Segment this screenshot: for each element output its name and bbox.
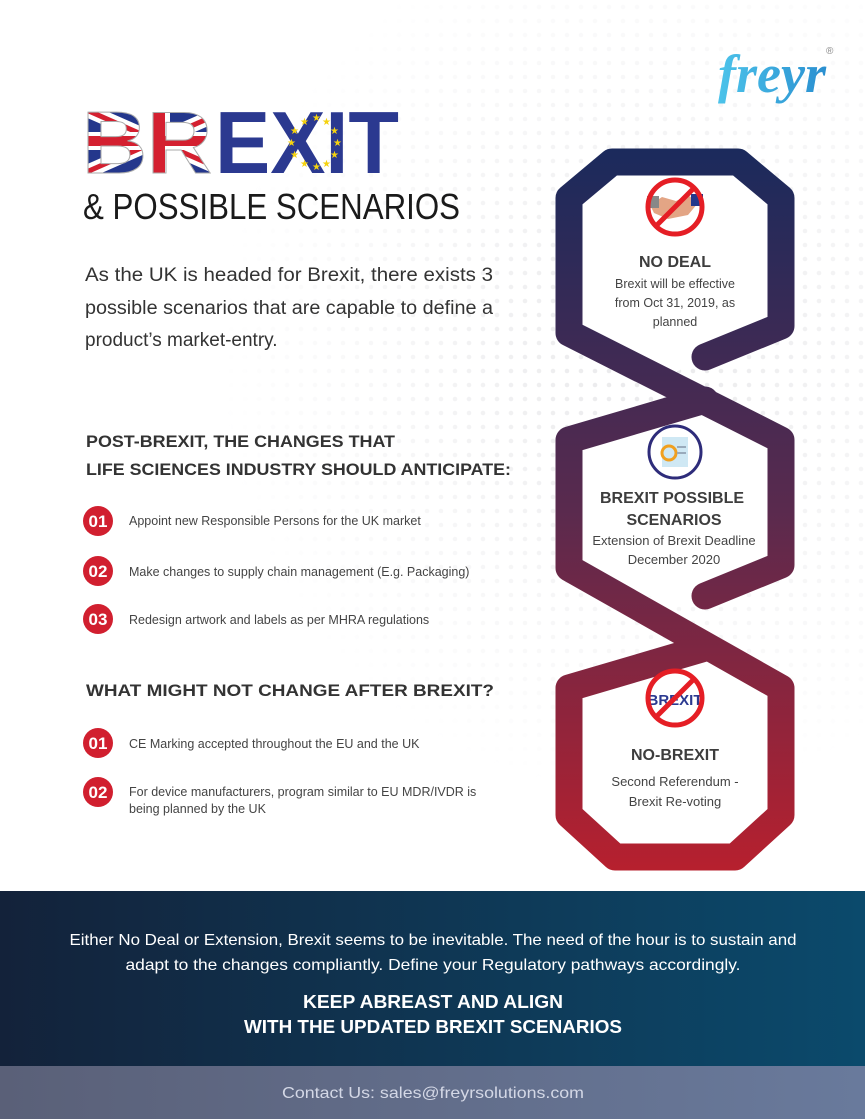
scenario: no-brexit: NO-BREXIT: [631, 747, 719, 764]
scenario: extension: December 2020: [628, 552, 720, 567]
intro paragraph: As the UK is headed for Brexit, there exists 3: [85, 265, 493, 286]
item 01: 01: [89, 512, 107, 531]
title: BREXIT: ★: [290, 150, 299, 161]
intro paragraph: product’s market-entry.: [85, 330, 278, 351]
item 03: [83, 604, 429, 634]
icon: no handshake: [646, 178, 704, 236]
footer band: adapt to the changes compliantly. Define your Regulatory pathways accordingly.: [126, 957, 740, 974]
item 02: Make changes to supply chain management (E.g. Packaging): [129, 565, 469, 579]
footer band: Either No Deal or Extension, Brexit seems to be inevitable. The need of the hour is to sustain and: [70, 932, 796, 949]
item 02: [83, 777, 476, 816]
title: BREXIT: [82, 93, 399, 192]
title: BREXIT: ★: [312, 113, 321, 124]
title: BREXIT: BR: [82, 93, 212, 192]
scenario: no deal: [615, 178, 735, 329]
scenario: extension: SCENARIOS: [626, 512, 722, 529]
item 02: 02: [89, 562, 107, 581]
contact bar: [0, 1066, 865, 1119]
title: BREXIT: ★: [330, 150, 339, 161]
item 01: CE Marking accepted throughout the EU and the UK: [129, 737, 420, 751]
item 02: 02: [89, 783, 107, 802]
title: BREXIT: ★: [300, 117, 309, 128]
logo: freyr: ®: [826, 46, 834, 57]
scenario: no deal: Brexit will be effective: [615, 277, 735, 291]
title: BREXIT: ★: [287, 138, 296, 149]
scenario: no-brexit: Second Referendum -: [611, 774, 739, 789]
list: changes: [83, 506, 469, 634]
item 03: Redesign artwork and labels as per MHRA regulations: [129, 613, 429, 627]
heading: post-brexit changes: [86, 432, 511, 479]
intro paragraph: [85, 265, 493, 351]
title: BREXIT: ★: [300, 159, 309, 170]
title: BREXIT: ★: [312, 162, 321, 173]
footer band: KEEP ABREAST AND ALIGN: [303, 992, 563, 1012]
title: BREXIT: ★: [322, 159, 331, 170]
icon: document: [649, 426, 701, 478]
hexagon chain: [569, 162, 781, 857]
title: BREXIT: ★: [290, 126, 299, 137]
scenario: no deal: NO DEAL: [639, 254, 711, 271]
footer band: WITH THE UPDATED BREXIT SCENARIOS: [244, 1017, 622, 1037]
heading: what might not change: WHAT MIGHT NOT CHANGE AFTER BREXIT?: [86, 681, 494, 700]
item 02: For device manufacturers, program similar to EU MDR/IVDR is: [129, 785, 476, 799]
item 02: [83, 556, 469, 586]
title: BREXIT: ★: [333, 138, 342, 149]
scenario: no-brexit: Brexit Re-voting: [629, 794, 721, 809]
item 03: 03: [89, 610, 107, 629]
item 01: [83, 506, 421, 536]
scenario: extension: Extension of Brexit Deadline: [592, 533, 756, 548]
heading: post-brexit changes: POST-BREXIT, THE CHANGES THAT: [86, 432, 396, 451]
icon: no brexit: BREXIT: [647, 692, 703, 709]
subtitle: & POSSIBLE SCENARIOS: [83, 186, 460, 227]
list: no change: [83, 728, 476, 816]
scenario: no-brexit: [611, 669, 739, 809]
heading: post-brexit changes: LIFE SCIENCES INDUSTRY SHOULD ANTICIPATE:: [86, 460, 511, 479]
title: BREXIT: EXIT: [215, 93, 399, 192]
item 01: [83, 728, 420, 758]
scenario: no deal: from Oct 31, 2019, as: [615, 296, 735, 310]
logo: freyr: freyr: [718, 44, 827, 104]
item 01: 01: [89, 734, 107, 753]
intro paragraph: possible scenarios that are capable to define a: [85, 298, 493, 319]
item 01: Appoint new Responsible Persons for the UK market: [129, 514, 421, 528]
scenario: extension: [592, 426, 756, 567]
scenario: extension: BREXIT POSSIBLE: [600, 490, 744, 507]
background dot pattern: [384, 89, 863, 625]
scenario: no deal: planned: [653, 315, 697, 329]
contact bar: Contact Us: sales@freyrsolutions.com: [282, 1085, 584, 1102]
footer band: [0, 891, 865, 1066]
title: BREXIT: ★: [330, 126, 339, 137]
title: BREXIT: ★: [322, 117, 331, 128]
item 02: being planned by the UK: [129, 802, 267, 816]
